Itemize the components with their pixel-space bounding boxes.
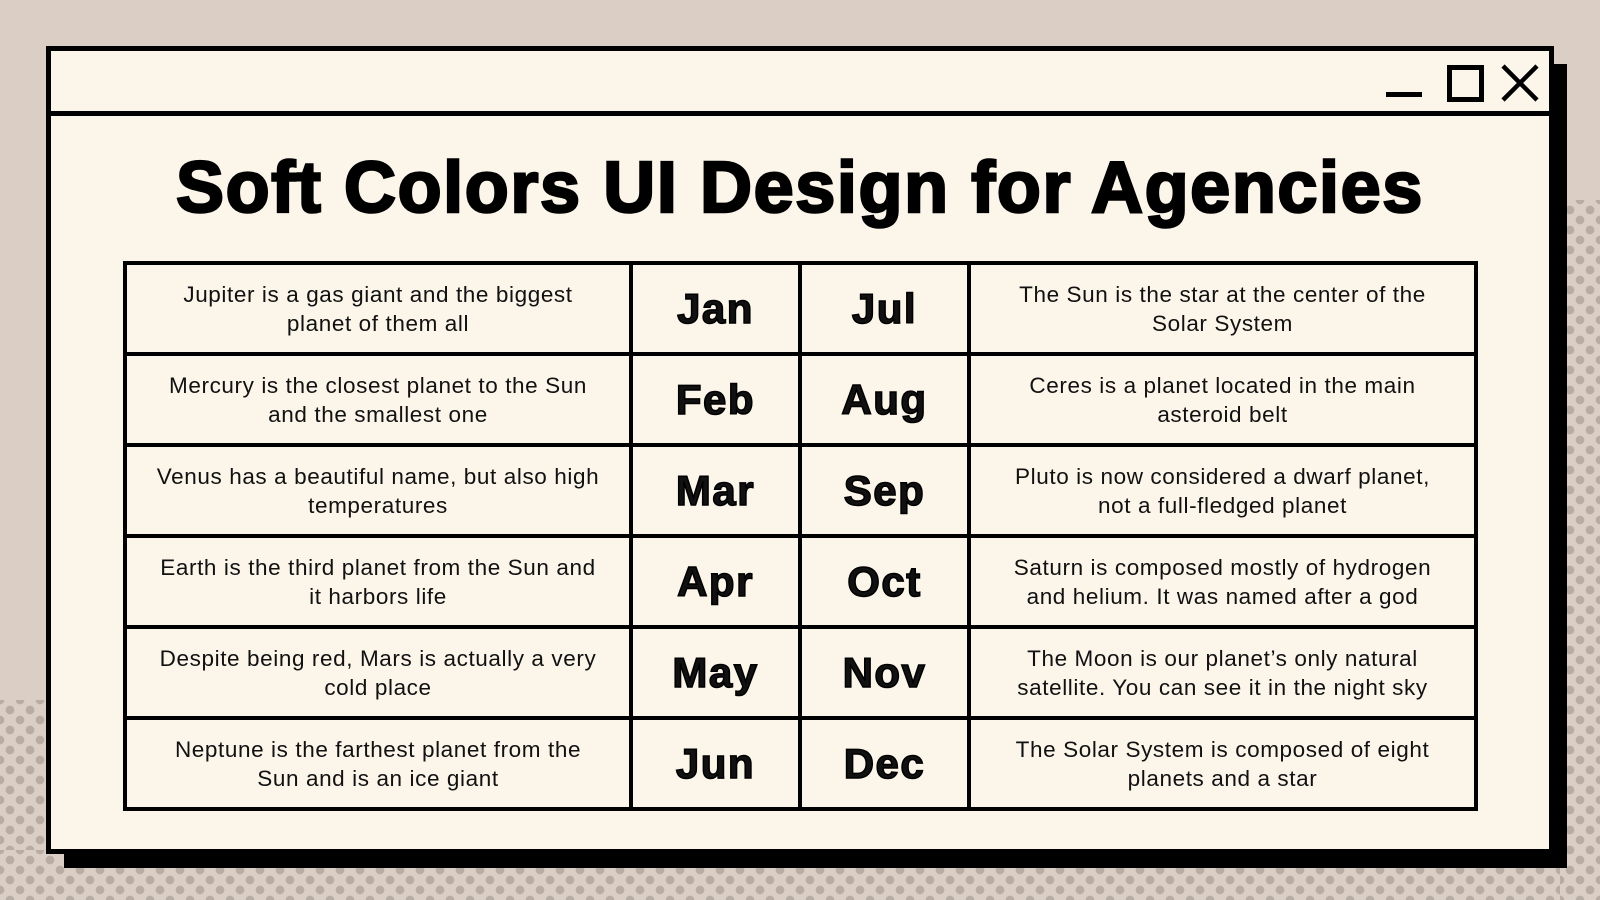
table: The Solar System is composed of eight: [1016, 736, 1429, 762]
table: May: [672, 649, 759, 696]
table: it harbors life: [309, 584, 447, 608]
table: The Moon is our planet’s only natural: [1027, 646, 1418, 670]
table: Despite being red, Mars is actually a very: [160, 646, 596, 670]
table: satellite. You can see it in the night sky: [1017, 674, 1428, 700]
table: Apr: [677, 558, 754, 605]
table: Earth is the third planet from the Sun and: [160, 554, 596, 580]
table: The Sun is the star at the center of the: [1019, 282, 1426, 306]
table: Neptune is the farthest planet from the: [175, 736, 581, 762]
table: cold place: [324, 674, 432, 700]
table: Ceres is a planet located in the main: [1029, 372, 1416, 398]
table: Mercury is the closest planet to the Sun: [169, 372, 587, 398]
table: and helium. It was named after a god: [1027, 584, 1418, 608]
table: temperatures: [308, 492, 448, 518]
table: Venus has a beautiful name, but also high: [157, 464, 599, 488]
table: Mar: [676, 467, 755, 514]
table: Sep: [844, 467, 925, 514]
table: [123, 261, 1478, 811]
table: Jul: [852, 285, 917, 332]
table: Oct: [847, 558, 922, 605]
icon: close: [1502, 64, 1538, 102]
table: asteroid belt: [1157, 402, 1288, 426]
table: Saturn is composed mostly of hydrogen: [1014, 554, 1431, 580]
table: Pluto is now considered a dwarf planet,: [1015, 464, 1430, 488]
table: planet of them all: [287, 310, 469, 336]
title bar: [51, 51, 1549, 116]
table: Dec: [844, 740, 925, 787]
table: planets and a star: [1128, 766, 1317, 790]
table: Jan: [677, 285, 754, 332]
table: Aug: [841, 376, 928, 423]
table: Feb: [676, 376, 755, 423]
table: Sun and is an ice giant: [257, 766, 499, 790]
title: Soft Colors UI Design for Agencies: [176, 148, 1424, 228]
table: not a full-fledged planet: [1098, 492, 1347, 518]
table: Nov: [843, 649, 926, 696]
table: and the smallest one: [268, 402, 488, 426]
table: Jupiter is a gas giant and the biggest: [183, 282, 573, 306]
table: Solar System: [1152, 310, 1293, 336]
table: Jun: [676, 740, 755, 787]
icon: minimize: [1386, 92, 1422, 97]
icon: maximize: [1447, 65, 1484, 102]
